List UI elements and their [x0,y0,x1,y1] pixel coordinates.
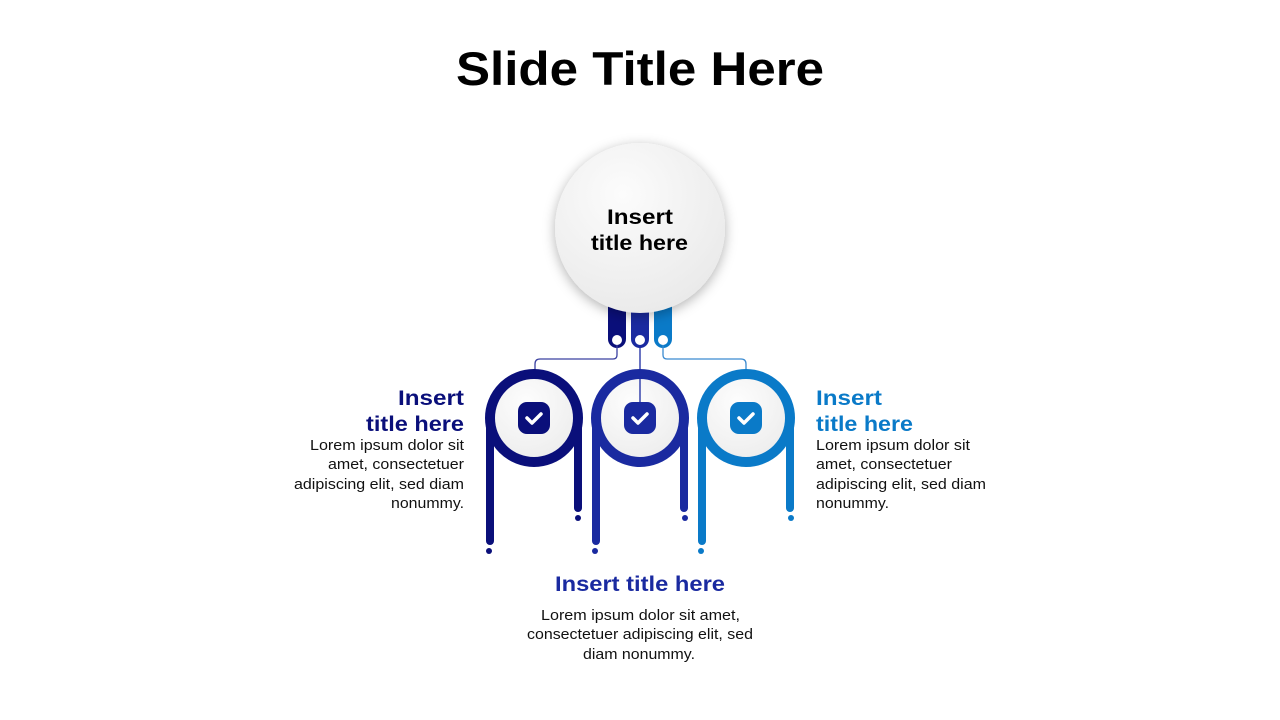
text: right: nonummy. [816,495,889,512]
text: bottom: consectetuer adipiscing elit, sed [527,626,753,643]
title: Slide Title Here [456,42,824,95]
ring 3 [698,374,794,554]
text: left: nonummy. [391,495,464,512]
ring 2 [592,370,688,554]
central circle [555,143,725,313]
connector lines [535,345,746,405]
text: left [294,387,465,512]
text: left: title here [366,413,464,436]
central circle: Insert [607,206,673,229]
text: left: adipiscing elit, sed diam [294,476,464,493]
text: right [816,387,986,512]
text: bottom: diam nonummy. [583,646,695,663]
text: left: amet, consectetuer [328,456,464,473]
text: right: adipiscing elit, sed diam [816,476,986,493]
text: right: title here [816,413,913,436]
text: right: amet, consectetuer [816,456,952,473]
central circle: title here [591,232,688,255]
text: right: Lorem ipsum dolor sit [816,437,971,454]
text: left: Insert [398,387,464,410]
tabs [608,290,672,348]
text: bottom [527,573,753,663]
text: bottom: Lorem ipsum dolor sit amet, [541,607,740,624]
ring 1 [486,374,581,554]
text: left: Lorem ipsum dolor sit [310,437,465,454]
text: right: Insert [816,387,882,410]
text: bottom: Insert title here [555,573,725,596]
